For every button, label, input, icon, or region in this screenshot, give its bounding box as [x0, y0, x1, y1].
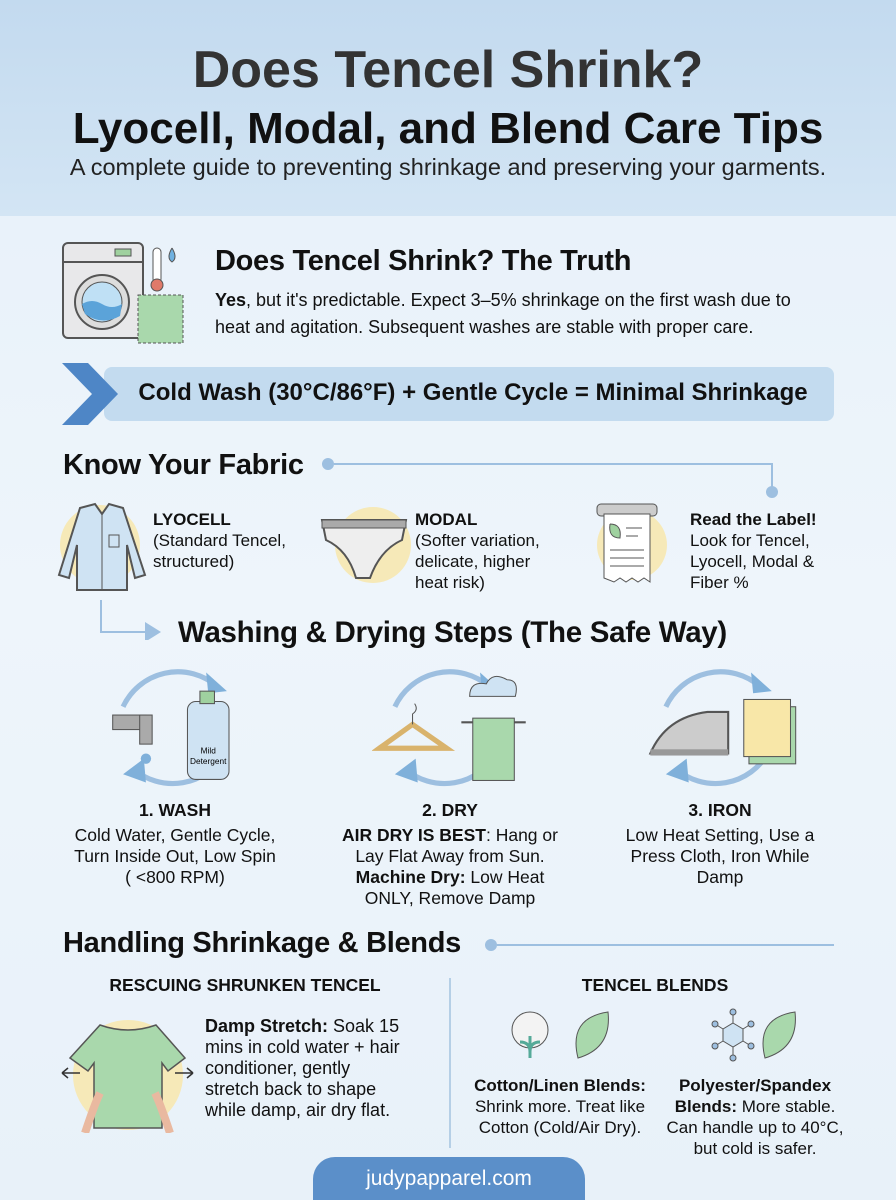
banner: cold wash: [62, 363, 834, 425]
panel: tencel blends: TENCEL BLENDS: [582, 975, 728, 995]
panel: tencel blends: Cotton/Linen Blends:: [474, 1076, 646, 1095]
panel: rescuing: [62, 975, 400, 1133]
step: dry: Lay Flat Away from Sun.: [355, 846, 545, 866]
fabric: lyocell: (Standard Tencel,: [153, 531, 286, 550]
panel: rescuing: stretch back to shape: [205, 1079, 376, 1099]
step: wash: 1. WASH: [139, 800, 211, 820]
panel: tencel blends: Can handle up to 40°C,: [667, 1118, 843, 1137]
divider: [449, 978, 451, 1148]
step: wash: Detergent: [190, 756, 227, 766]
arrow connector: [100, 600, 161, 640]
panel: tencel blends: but cold is safer.: [694, 1139, 816, 1158]
step: iron: Damp: [697, 867, 743, 887]
title: [73, 41, 823, 153]
footer: website: judypapparel.com: [366, 1167, 532, 1190]
step: dry: Machine Dry: Low Heat: [356, 867, 544, 887]
step: iron: [626, 669, 814, 887]
heading: handling shrinkage: Handling Shrinkage & Blends: [63, 927, 461, 959]
panel: tencel blends: Cotton (Cold/Air Dry).: [479, 1118, 641, 1137]
fabric: lyocell: [58, 502, 286, 591]
panel: tencel blends: Polyester/Spandex: [679, 1076, 831, 1095]
fabric: lyocell: structured): [153, 552, 234, 571]
panel: rescuing: conditioner, gently: [205, 1058, 350, 1078]
section: does tencel shrink: Does Tencel Shrink? The Truth: [215, 245, 631, 277]
panel: tencel blends: [474, 975, 843, 1158]
panel: rescuing: RESCUING SHRUNKEN TENCEL: [109, 975, 381, 995]
title: Does Tencel Shrink?: [193, 41, 703, 99]
fabric: modal: heat risk): [415, 573, 485, 592]
header band: [0, 0, 896, 216]
panel: tencel blends: Shrink more. Treat like: [475, 1097, 645, 1116]
banner: cold wash: Cold Wash (30°C/86°F) + Gentle Cycle = Minimal Shrinkage: [138, 379, 808, 406]
step: iron: Low Heat Setting, Use a: [626, 825, 814, 845]
footer: website: [313, 1157, 585, 1200]
step: dry: AIR DRY IS BEST: Hang or: [342, 825, 558, 845]
fabric: read the label: Fiber %: [690, 573, 749, 592]
title: Lyocell, Modal, and Blend Care Tips: [73, 104, 823, 153]
fabric: lyocell: LYOCELL: [153, 510, 231, 529]
fabric: read the label: [596, 504, 817, 592]
fabric: modal: delicate, higher: [415, 552, 530, 571]
fabric: modal: MODAL: [415, 510, 477, 529]
step: dry: ONLY, Remove Damp: [365, 888, 535, 908]
step: iron: 3. IRON: [688, 800, 752, 820]
icon: washing machine: [62, 242, 184, 344]
step: wash: Turn Inside Out, Low Spin: [74, 846, 276, 866]
fabric: modal: [320, 507, 540, 592]
step: wash: Mild: [201, 745, 216, 755]
icon: molecule and leaf: [712, 1008, 796, 1062]
step: iron: Press Cloth, Iron While: [631, 846, 809, 866]
subtitle: A complete guide to preventing shrinkage and preserving your garments.: [70, 154, 826, 180]
heading: know your fabric: Know Your Fabric: [63, 449, 304, 481]
section: does tencel shrink: Yes, but it's predictable. Expect 3–5% shrinkage on the first wash due to heat and agitation. Subsequent washes are stable with proper care.: [215, 290, 791, 337]
fabric: read the label: Look for Tencel,: [690, 531, 810, 550]
panel: rescuing: Damp Stretch: Soak 15: [205, 1016, 399, 1036]
heading: washing steps: Washing & Drying Steps (The Safe Way): [178, 616, 727, 649]
panel: rescuing: while damp, air dry flat.: [205, 1100, 390, 1120]
fabric: read the label: Read the Label!: [690, 510, 817, 529]
step: wash: [74, 669, 276, 887]
step: wash: ( <800 RPM): [125, 867, 225, 887]
fabric: read the label: Lyocell, Modal &: [690, 552, 814, 571]
icon: cotton and leaf: [512, 1011, 609, 1059]
panel: tencel blends: Blends: More stable.: [675, 1097, 835, 1116]
connector line: [322, 458, 778, 498]
section: does tencel shrink: [215, 245, 791, 337]
panel: rescuing: mins in cold water + hair: [205, 1037, 400, 1057]
step: dry: [342, 669, 558, 908]
step: wash: Cold Water, Gentle Cycle,: [75, 825, 275, 845]
fabric: modal: (Softer variation,: [415, 531, 540, 550]
step: dry: 2. DRY: [422, 800, 478, 820]
